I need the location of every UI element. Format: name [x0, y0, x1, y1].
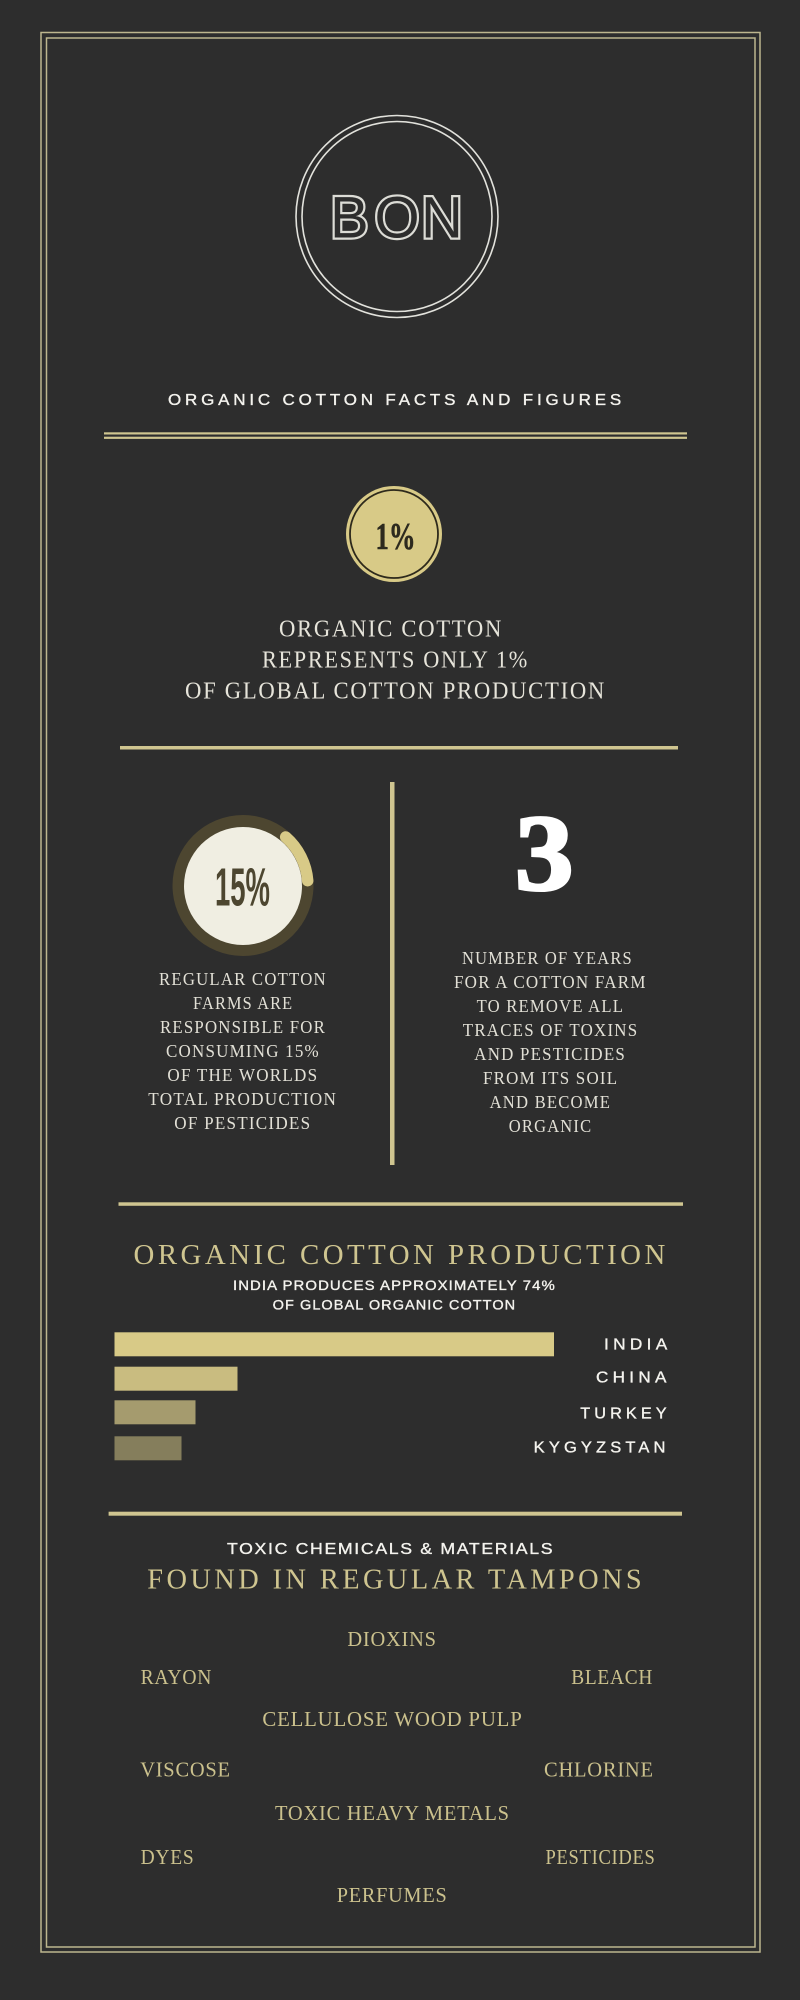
text: 1 percent fact: ORGANIC COTTON — [279, 617, 503, 643]
text: 15 percent fact: FARMS ARE — [193, 993, 293, 1013]
text: 1 percent fact — [185, 617, 606, 705]
text: 15 percent fact: REGULAR COTTON — [159, 969, 327, 989]
list: toxic materials: DYES — [141, 1845, 194, 1869]
text: 15 percent fact: OF PESTICIDES — [174, 1113, 311, 1133]
text: 1 percent fact: REPRESENTS ONLY 1% — [262, 648, 529, 674]
bar chart: production by country: KYGYZSTAN — [534, 1440, 670, 1457]
divider — [118, 1202, 683, 1206]
badge: 1% — [346, 486, 442, 582]
subheading: India share: OF GLOBAL ORGANIC COTTON — [273, 1296, 516, 1312]
text: 15 percent fact: CONSUMING 15% — [166, 1041, 320, 1061]
bar chart: production by country: TURKEY — [580, 1405, 671, 1422]
divider — [109, 1512, 682, 1516]
heading: organic cotton production: ORGANIC COTTON PRODUCTION — [134, 1239, 669, 1271]
list: toxic materials: VISCOSE — [140, 1758, 231, 1782]
text: 15 percent fact — [148, 969, 337, 1133]
list: toxic materials: CHLORINE — [544, 1758, 654, 1782]
text: 3 years fact: NUMBER OF YEARS — [462, 948, 633, 968]
text: 3 years fact: ORGANIC — [509, 1116, 592, 1136]
text: 1 percent fact: OF GLOBAL COTTON PRODUCTION — [185, 679, 606, 705]
logo: BON double circle — [296, 116, 498, 318]
list: toxic materials: PESTICIDES — [546, 1845, 656, 1869]
list: toxic materials: PERFUMES — [337, 1883, 448, 1907]
text: 3 years fact: FOR A COTTON FARM — [454, 972, 647, 992]
big number 3: 3 — [515, 794, 574, 914]
text: 3 years fact: AND BECOME — [490, 1092, 611, 1112]
divider — [120, 746, 678, 750]
text: 15 percent fact: TOTAL PRODUCTION — [148, 1089, 337, 1109]
bar chart: production by country — [114, 1332, 672, 1460]
text: 15 percent fact: OF THE WORLDS — [167, 1065, 318, 1085]
subheading: India share: INDIA PRODUCES APPROXIMATELY 74% — [233, 1277, 556, 1293]
text: 3 years fact: TO REMOVE ALL — [477, 996, 624, 1016]
text: 15 percent fact: RESPONSIBLE FOR — [160, 1017, 326, 1037]
subheading: India share — [233, 1277, 556, 1312]
badge: 1%: 1% — [376, 516, 416, 558]
list: toxic materials: RAYON — [141, 1665, 212, 1689]
text: 3 years fact — [454, 948, 647, 1136]
bar chart: production by country: INDIA — [604, 1337, 672, 1354]
heading: found in regular tampons: FOUND IN REGULAR TAMPONS — [147, 1563, 645, 1595]
subheading: toxic chemicals: TOXIC CHEMICALS & MATERIALS — [227, 1541, 554, 1558]
donut chart: 15%: 15% — [215, 857, 270, 917]
text: 3 years fact: TRACES OF TOXINS — [463, 1020, 638, 1040]
list: toxic materials — [140, 1627, 655, 1907]
list: toxic materials: BLEACH — [571, 1665, 653, 1689]
logo: BON double circle: BON — [330, 185, 463, 250]
title double divider — [104, 432, 687, 439]
list: toxic materials: CELLULOSE WOOD PULP — [262, 1707, 523, 1731]
list: toxic materials: DIOXINS — [347, 1627, 437, 1651]
title: ORGANIC COTTON FACTS AND FIGURES — [168, 392, 625, 409]
vertical divider — [390, 782, 394, 1165]
list: toxic materials: TOXIC HEAVY METALS — [275, 1801, 510, 1825]
text: 3 years fact: FROM ITS SOIL — [483, 1068, 618, 1088]
bar chart: production by country: CHINA — [596, 1370, 671, 1387]
donut chart: 15% — [172, 815, 314, 956]
logo: BON double circle: BON — [330, 185, 463, 250]
text: 3 years fact: AND PESTICIDES — [474, 1044, 626, 1064]
